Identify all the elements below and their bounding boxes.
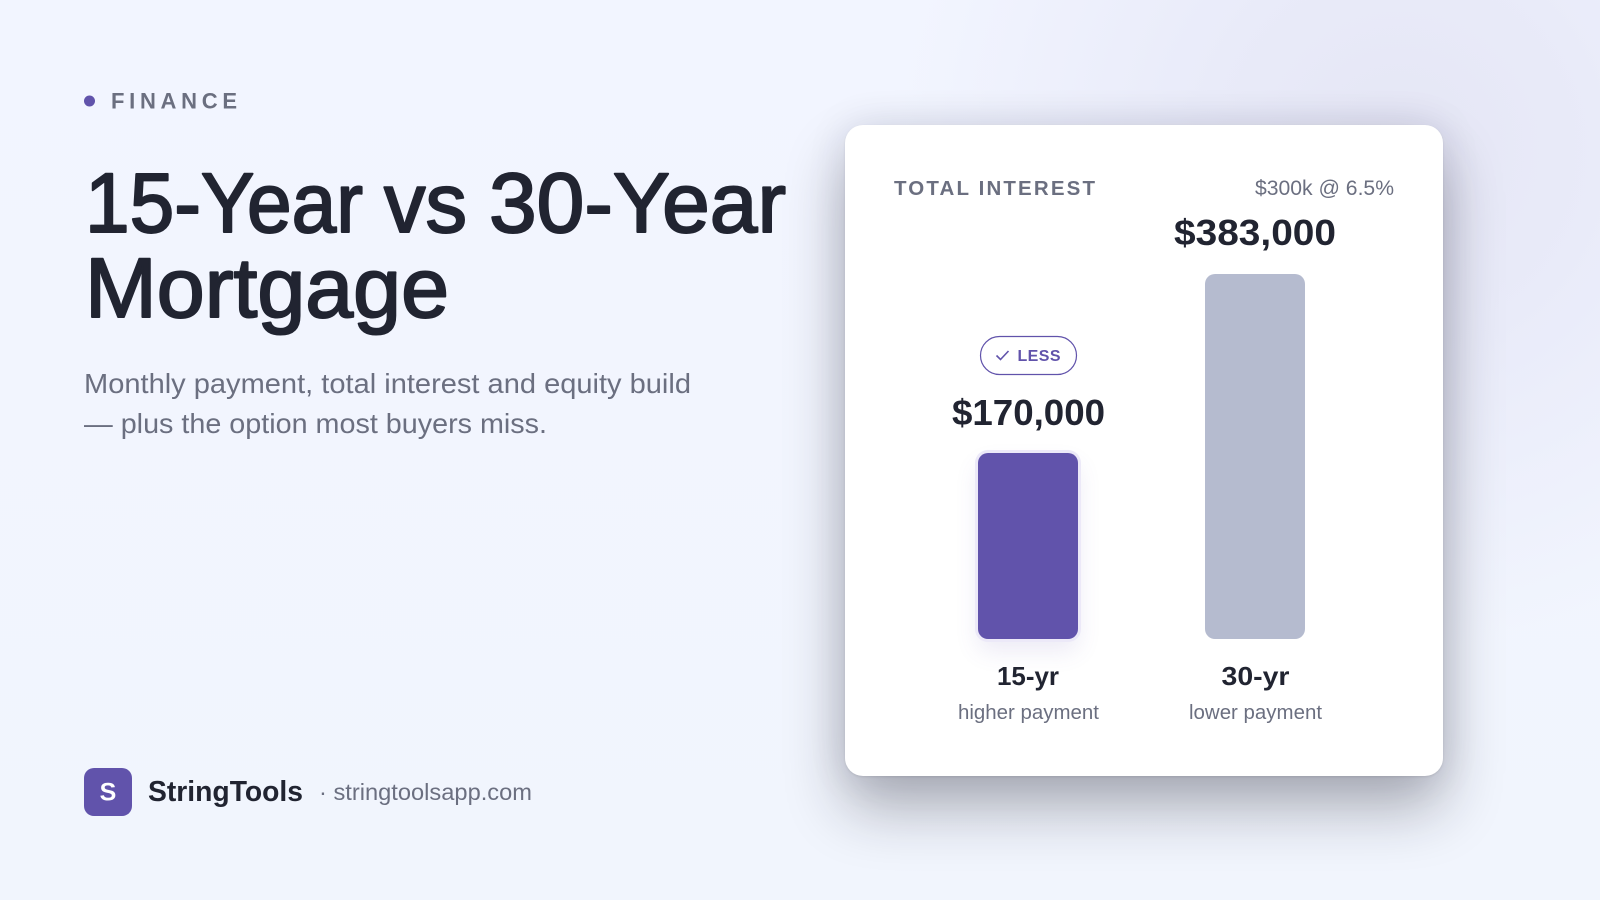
brand name: StringTools (148, 776, 303, 808)
eyebrow label: FINANCE (111, 88, 237, 114)
panel: total interest card (845, 125, 1443, 776)
loan assumption: $300k @ 6.5% (1255, 177, 1394, 200)
title: 30-Year (489, 156, 786, 250)
brand logo: S (100, 778, 116, 806)
title: Mortgage (85, 241, 449, 335)
subtitle: — plus the option most buyers miss. (84, 408, 547, 439)
label: 30-yr: 30-yr (1222, 661, 1290, 691)
subtitle: Monthly payment, total interest and equity build (84, 368, 691, 399)
bar: 15-year (978, 453, 1078, 639)
left column text (84, 88, 786, 816)
brand logo (84, 768, 132, 816)
eyebrow dot (84, 96, 95, 106)
subtitle (84, 368, 691, 439)
badge: less: LESS (1018, 348, 1061, 365)
value: 30-year interest: $383,000 (1174, 212, 1336, 253)
eyebrow: finance category (84, 88, 237, 114)
icon: check mark (996, 351, 1008, 360)
card heading: TOTAL INTEREST (894, 177, 1095, 200)
badge: less (980, 336, 1076, 374)
title: vs (384, 156, 467, 250)
label: 15-yr: 15-yr (997, 661, 1059, 691)
brand footer (84, 768, 532, 816)
note: higher payment: higher payment (958, 702, 1099, 724)
brand url: · stringtoolsapp.com (319, 779, 532, 805)
value: 15-year interest: $170,000 (952, 392, 1105, 433)
title: 15-Year (85, 156, 363, 250)
bar: 30-year (1205, 274, 1305, 639)
card text and badge (894, 177, 1394, 724)
note: lower payment: lower payment (1189, 702, 1322, 724)
title (85, 156, 786, 335)
